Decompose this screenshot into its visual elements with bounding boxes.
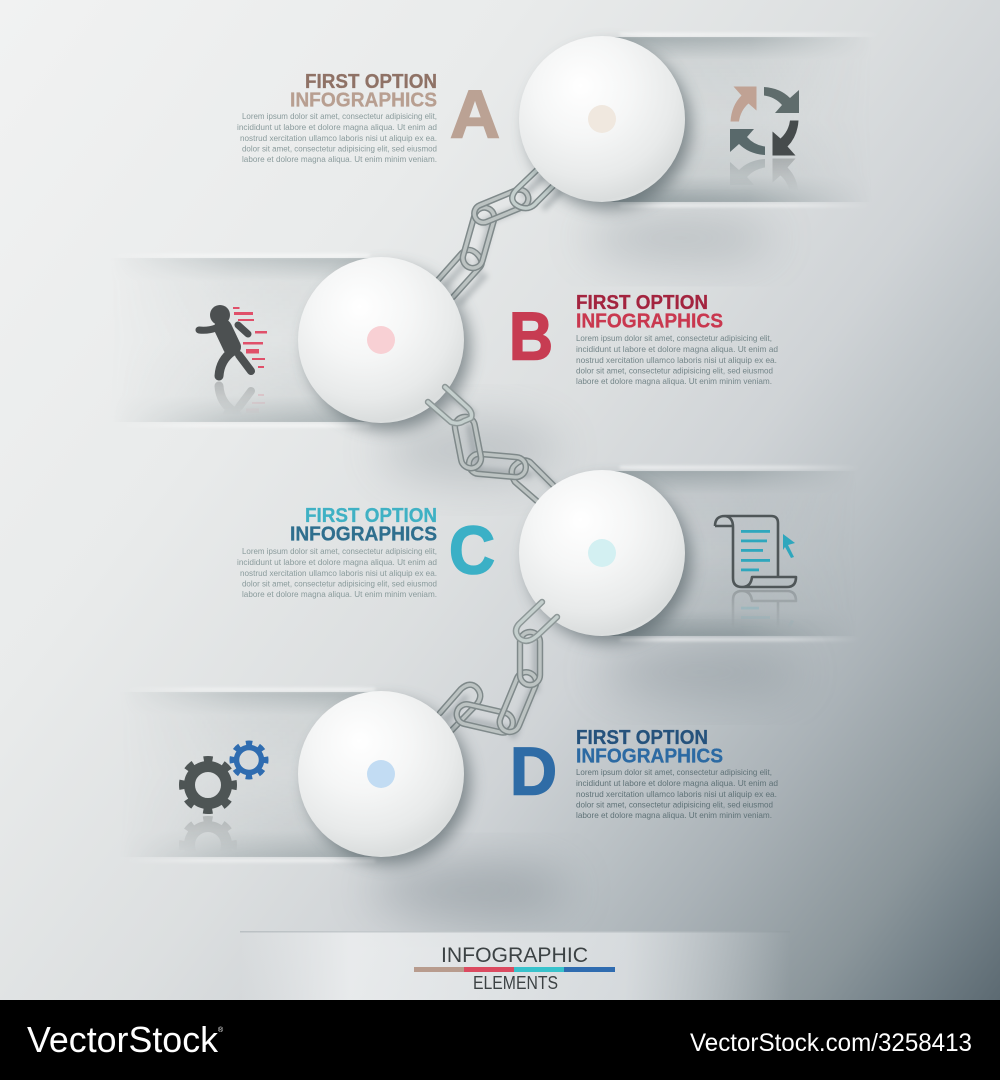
ball B	[298, 257, 470, 430]
icon: scroll with cursor	[714, 514, 798, 619]
letter B: B	[509, 298, 553, 374]
watermark bar: VectorStock.com/3258413	[690, 1029, 972, 1057]
ball D	[298, 691, 470, 864]
chain: A to B	[438, 167, 563, 304]
icon: rotating arrows	[730, 86, 799, 184]
text block C: dolor sit amet, consectetur adipisicing elit, sed eiusmod	[242, 578, 437, 588]
text block D: nostrud xercitation ullamco laboris nisi ut aliquip ex ea.	[576, 789, 777, 799]
ball C	[519, 470, 691, 643]
text block C	[237, 504, 437, 599]
letter D: D	[510, 734, 557, 810]
text block D: labore et dolore magna aliqua. Ut enim minim veniam.	[576, 810, 772, 820]
text block A: nostrud xercitation ullamco laboris nisi ut aliquip ex ea.	[240, 133, 437, 143]
text block B: INFOGRAPHICS	[576, 310, 723, 332]
text block B: nostrud xercitation ullamco laboris nisi ut aliquip ex ea.	[576, 355, 777, 365]
panel: band A	[604, 33, 852, 208]
footer band	[240, 931, 790, 1000]
watermark bar: ®	[218, 1026, 224, 1034]
panel: band B	[136, 254, 368, 427]
text block C: INFOGRAPHICS	[290, 522, 437, 546]
text block A: incididunt ut labore et dolore magna aliqua. Ut enim ad	[237, 122, 437, 132]
footer title: INFOGRAPHIC	[441, 943, 588, 967]
panel: band C	[602, 466, 860, 641]
text block A: dolor sit amet, consectetur adipisicing elit, sed eiusmod	[242, 144, 437, 154]
text block D: incididunt ut labore et dolore magna aliqua. Ut enim ad	[576, 778, 778, 788]
text block D	[576, 726, 778, 820]
chain ends over balls	[428, 387, 557, 641]
chain: C to D	[440, 632, 540, 738]
text block C: labore et dolore magna aliqua. Ut enim minim veniam.	[242, 589, 437, 599]
watermark bar: VectorStock	[27, 1019, 219, 1060]
icon: gears	[179, 740, 268, 844]
text block B: incididunt ut labore et dolore magna aliqua. Ut enim ad	[576, 344, 778, 354]
text block B: Lorem ipsum dolor sit amet, consectetur adipisicing elit,	[576, 333, 772, 343]
text block A: labore et dolore magna aliqua. Ut enim minim veniam.	[242, 154, 437, 164]
text block A: Lorem ipsum dolor sit amet, consectetur adipisicing elit,	[242, 111, 437, 121]
text block B: labore et dolore magna aliqua. Ut enim minim veniam.	[576, 376, 772, 386]
text block C: incididunt ut labore et dolore magna aliqua. Ut enim ad	[237, 557, 437, 567]
footer title: ELEMENTS	[473, 973, 558, 993]
text block A: FIRST OPTION	[305, 70, 437, 93]
footer title	[414, 943, 615, 993]
icon: running person	[196, 305, 267, 408]
text block B: FIRST OPTION	[576, 291, 708, 314]
colour bar	[414, 967, 615, 972]
text block C: FIRST OPTION	[305, 504, 437, 527]
text block B	[576, 291, 778, 386]
chain: B to C	[451, 394, 559, 502]
watermark bar	[0, 1000, 1000, 1080]
letter A: A	[450, 76, 500, 152]
letter C: C	[449, 512, 495, 588]
text block A	[237, 70, 437, 164]
soft shadows under the panels	[370, 216, 800, 916]
text block D: Lorem ipsum dolor sit amet, consectetur adipisicing elit,	[576, 767, 772, 777]
text block D: dolor sit amet, consectetur adipisicing elit, sed eiusmod	[576, 800, 773, 810]
panel: band D	[148, 688, 378, 863]
ball A	[519, 36, 691, 209]
text block D: FIRST OPTION	[576, 726, 708, 749]
text block B: dolor sit amet, consectetur adipisicing elit, sed eiusmod	[576, 366, 773, 376]
text block C: nostrud xercitation ullamco laboris nisi ut aliquip ex ea.	[240, 568, 437, 578]
text block A: INFOGRAPHICS	[290, 88, 437, 112]
text block C: Lorem ipsum dolor sit amet, consectetur adipisicing elit,	[242, 546, 437, 556]
text block D: INFOGRAPHICS	[576, 744, 723, 768]
